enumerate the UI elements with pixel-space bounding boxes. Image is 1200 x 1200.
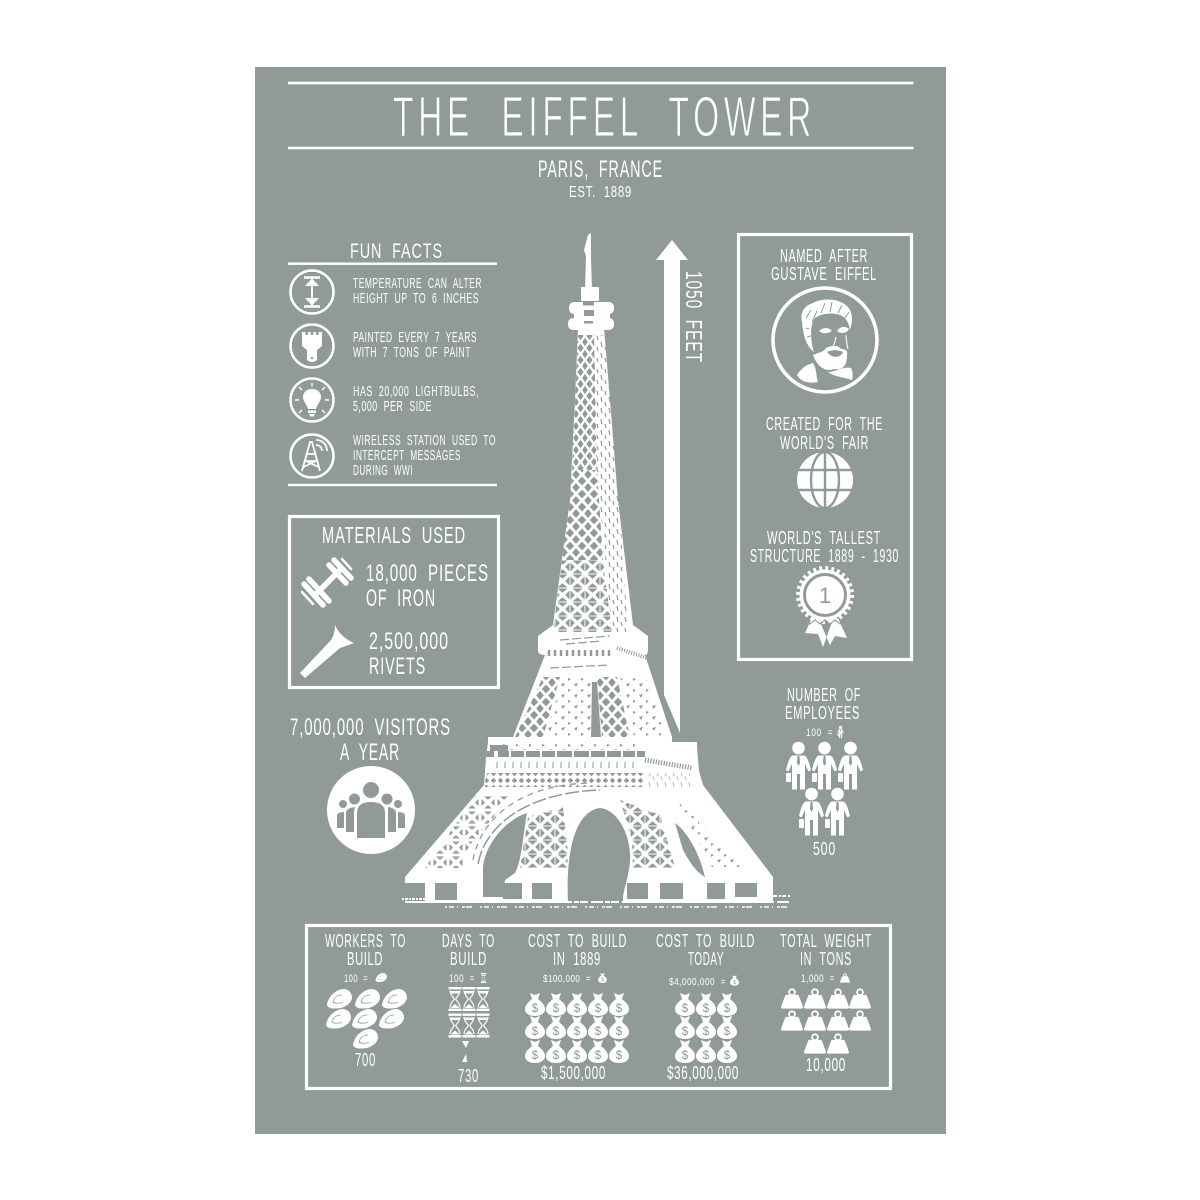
icon: rivet — [300, 625, 354, 678]
stat: days — [442, 931, 495, 1086]
panel: number of employees: EMPLOYEES — [785, 703, 860, 723]
panel: materials used: MATERIALS USED — [322, 522, 466, 548]
height arrow — [656, 240, 688, 733]
lattice — [425, 335, 743, 868]
subtitle: PARIS, FRANCE — [538, 156, 663, 183]
icon: height arrow — [290, 270, 334, 314]
stat: total weight — [780, 931, 872, 1075]
panel: number of employees: 100 = — [806, 727, 833, 739]
visitors stat: 7,000,000 VISITORS — [290, 714, 451, 741]
panel: fun facts: FUN FACTS — [350, 240, 443, 263]
panel: facts about the tower — [738, 234, 912, 660]
stat: workers: 700 — [355, 1050, 376, 1070]
railing posts — [510, 750, 636, 758]
panel: fun facts: TEMPERATURE CAN ALTER — [353, 276, 482, 292]
stat: cost in 1889: COST TO BUILD — [528, 931, 627, 951]
panel: number of employees: 500 — [813, 839, 836, 859]
subtitle — [538, 156, 663, 201]
stat: total weight: IN TONS — [800, 949, 852, 969]
icon: paint brush — [290, 324, 334, 368]
panel: fun facts: HEIGHT UP TO 6 INCHES — [353, 291, 479, 307]
stat: cost in 1889: $1,500,000 — [541, 1063, 606, 1083]
panel: materials used: 2,500,000 — [369, 628, 449, 655]
icon: first place ribbon: 1 — [819, 583, 831, 608]
panel: facts about the tower: NAMED AFTER — [780, 246, 868, 266]
tower voids — [405, 302, 757, 903]
illustration: eiffel tower — [402, 233, 790, 907]
panel: number of employees: NUMBER OF — [787, 685, 861, 705]
panel: facts about the tower: STRUCTURE 1889 - 1930 — [750, 546, 899, 566]
stat: cost in 1889: IN 1889 — [553, 949, 601, 969]
panel: fun facts: DURING WWI — [353, 463, 413, 479]
stat: days: 730 — [458, 1066, 479, 1086]
stat: total weight: 1,000 = — [801, 973, 835, 985]
panel: materials used: 18,000 PIECES — [366, 560, 489, 587]
subtitle: EST. 1889 — [569, 184, 632, 201]
stat: cost today: $4,000,000 = — [669, 976, 726, 988]
panel: facts about the tower: WORLD'S TALLEST — [767, 528, 881, 548]
height label: 1050 FEET — [681, 271, 707, 363]
panel: fun facts — [288, 240, 497, 486]
panel: materials used — [290, 516, 498, 688]
stat: cost today — [656, 931, 755, 1083]
panel: construction statistics — [306, 926, 890, 1088]
icon: light bulb — [290, 378, 334, 422]
panel: facts about the tower: GUSTAVE EIFFEL — [771, 264, 877, 284]
visitors stat: A YEAR — [340, 739, 400, 766]
panel: number of employees — [785, 685, 863, 859]
stat: workers: BUILD — [347, 949, 383, 969]
panel: fun facts: 5,000 PER SIDE — [353, 399, 432, 415]
tower silhouette — [405, 233, 773, 903]
panel: fun facts: INTERCEPT MESSAGES — [353, 448, 461, 464]
stat: days: 100 = — [449, 973, 475, 985]
icon: crowd — [327, 766, 415, 854]
panel: fun facts: WIRELESS STATION USED TO — [353, 433, 496, 449]
stat: total weight: 10,000 — [806, 1055, 846, 1075]
visitors stat — [290, 714, 451, 854]
panel: facts about the tower: WORLD'S FAIR — [780, 433, 869, 453]
poster background — [255, 67, 946, 1134]
panel: fun facts: PAINTED EVERY 7 YEARS — [353, 330, 477, 346]
pictogram: employees — [786, 742, 863, 836]
panel: fun facts: WITH 7 TONS OF PAINT — [353, 345, 471, 361]
panel: materials used: RIVETS — [369, 653, 426, 680]
upper platform ticks — [549, 650, 609, 656]
icon: employee key — [837, 726, 844, 738]
stat: workers: WORKERS TO — [325, 931, 406, 951]
icon: wireless tower — [290, 434, 334, 478]
panel: materials used: OF IRON — [366, 585, 436, 612]
stat: total weight: TOTAL WEIGHT — [780, 931, 872, 951]
ground texture — [402, 896, 790, 907]
stat: workers — [325, 931, 407, 1070]
stat: days: DAYS TO — [442, 931, 495, 951]
icon: dumbbell — [302, 559, 351, 605]
icon: globe — [797, 452, 853, 508]
title: THE EIFFEL TOWER — [393, 85, 816, 149]
stat: cost today: $36,000,000 — [667, 1063, 739, 1083]
icon: portrait of gustave eiffel — [773, 288, 877, 392]
icon: first place ribbon — [798, 568, 852, 647]
stat: cost in 1889 — [525, 931, 629, 1083]
stat: cost in 1889: $100,000 = — [543, 973, 591, 985]
deck ticks and arcs — [497, 762, 633, 768]
stat: cost today: TODAY — [688, 949, 724, 969]
panel: fun facts: HAS 20,000 LIGHTBULBS, — [353, 384, 479, 400]
panel: facts about the tower: CREATED FOR THE — [766, 414, 883, 434]
stat: cost today: COST TO BUILD — [656, 931, 755, 951]
stat: days: BUILD — [450, 949, 487, 969]
stat: workers: 100 = — [344, 973, 368, 985]
